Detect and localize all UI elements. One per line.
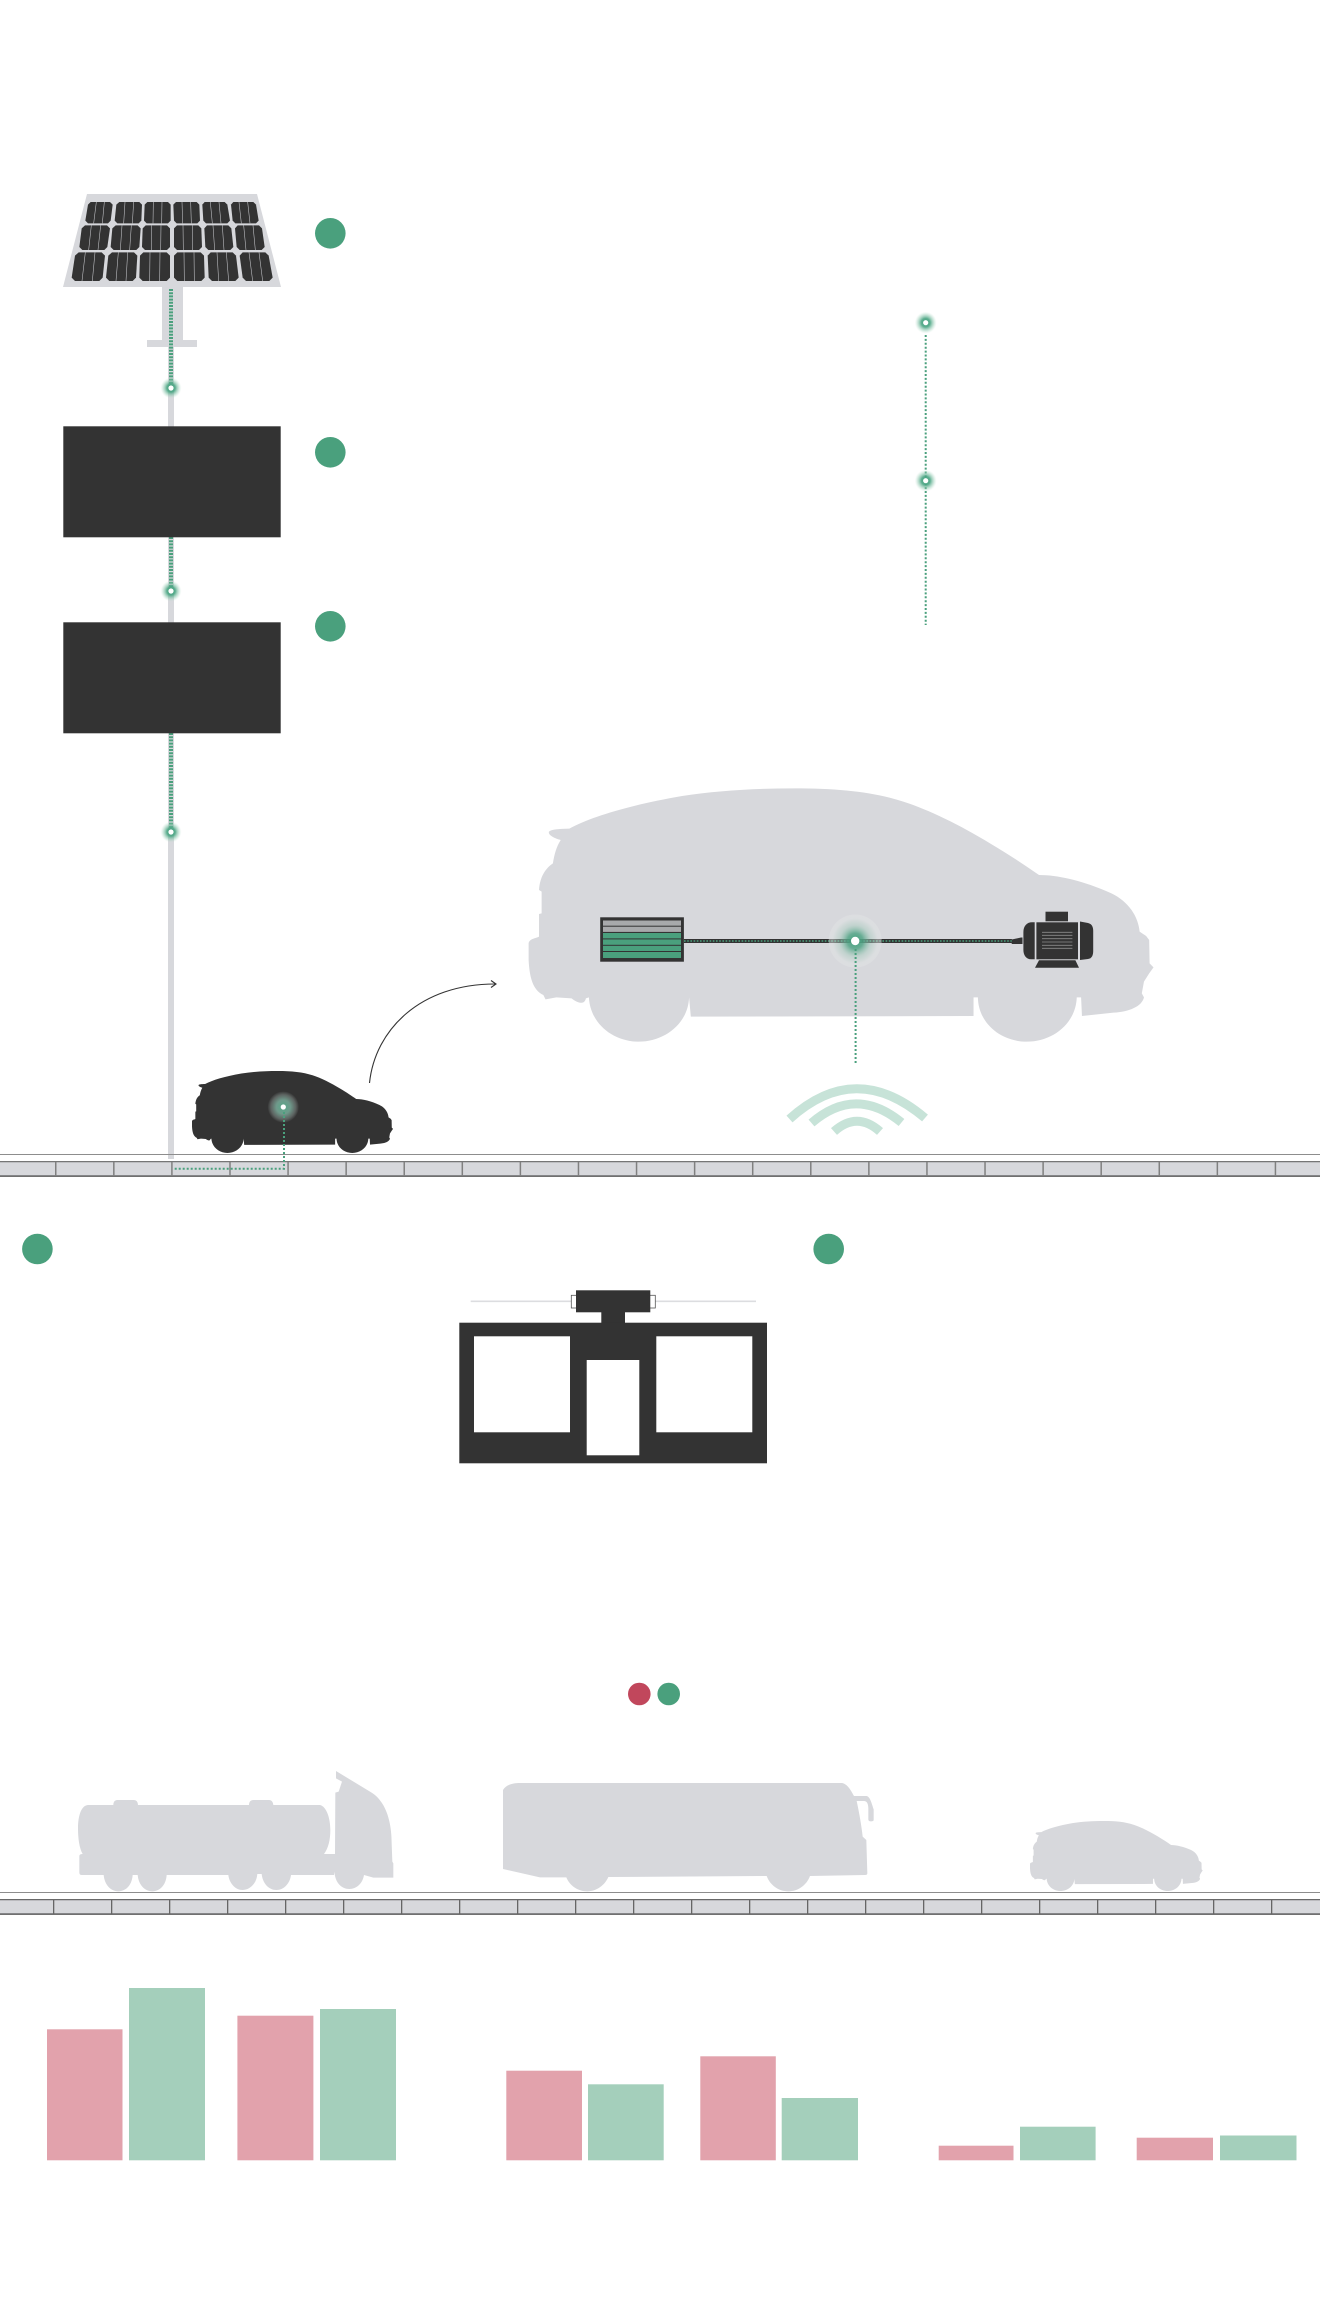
small grey car silhouette (1030, 1821, 1203, 1891)
legend: green marker (657, 1683, 680, 1705)
station right window (656, 1336, 752, 1432)
dotted line from car to pole (173, 1112, 284, 1169)
green marker: solar (315, 218, 346, 249)
node on small car (268, 1092, 299, 1122)
charging station (459, 1290, 767, 1463)
timeline node lower (915, 470, 937, 492)
central glowing node on car (829, 914, 882, 968)
solar power pole (63, 194, 281, 1159)
solar panel cells (72, 202, 273, 281)
dotted vertical timeline, top right (915, 312, 937, 625)
flow node 2 (160, 580, 182, 602)
green marker: lower box (315, 611, 346, 642)
dark panel: upper box (63, 426, 281, 537)
bus bars (506, 2056, 858, 2160)
electric motor (1012, 912, 1093, 968)
solar panel frame (63, 194, 281, 287)
green marker: upper box (315, 437, 346, 468)
flow node 3 (160, 822, 182, 842)
flow node 1 (160, 378, 182, 398)
green marker: left column (22, 1234, 53, 1264)
dark panel: lower box (63, 622, 281, 733)
bus silhouette (503, 1783, 874, 1891)
car bars (939, 2127, 1296, 2160)
station left window (474, 1336, 570, 1432)
small dark car (192, 1071, 393, 1153)
solar panel stand (147, 287, 197, 347)
bar chart: vehicle comparison (47, 1988, 1296, 2160)
battery pack (600, 917, 684, 962)
timeline node upper (915, 312, 937, 334)
icon: wireless signal (790, 1089, 925, 1132)
dotted energy flow along pole (169, 289, 173, 832)
lower road (0, 1892, 1320, 1915)
dotted line to wireless signal (855, 949, 857, 1065)
tanker truck silhouette (78, 1771, 393, 1891)
power cable (684, 939, 1012, 943)
truck bars (47, 1988, 396, 2160)
green marker: right column (813, 1234, 844, 1264)
curved arrow (370, 980, 496, 1083)
enlarged car silhouette (529, 788, 1154, 1042)
legend: red marker (628, 1683, 651, 1705)
upper road (0, 1154, 1320, 1177)
station door (587, 1360, 639, 1455)
